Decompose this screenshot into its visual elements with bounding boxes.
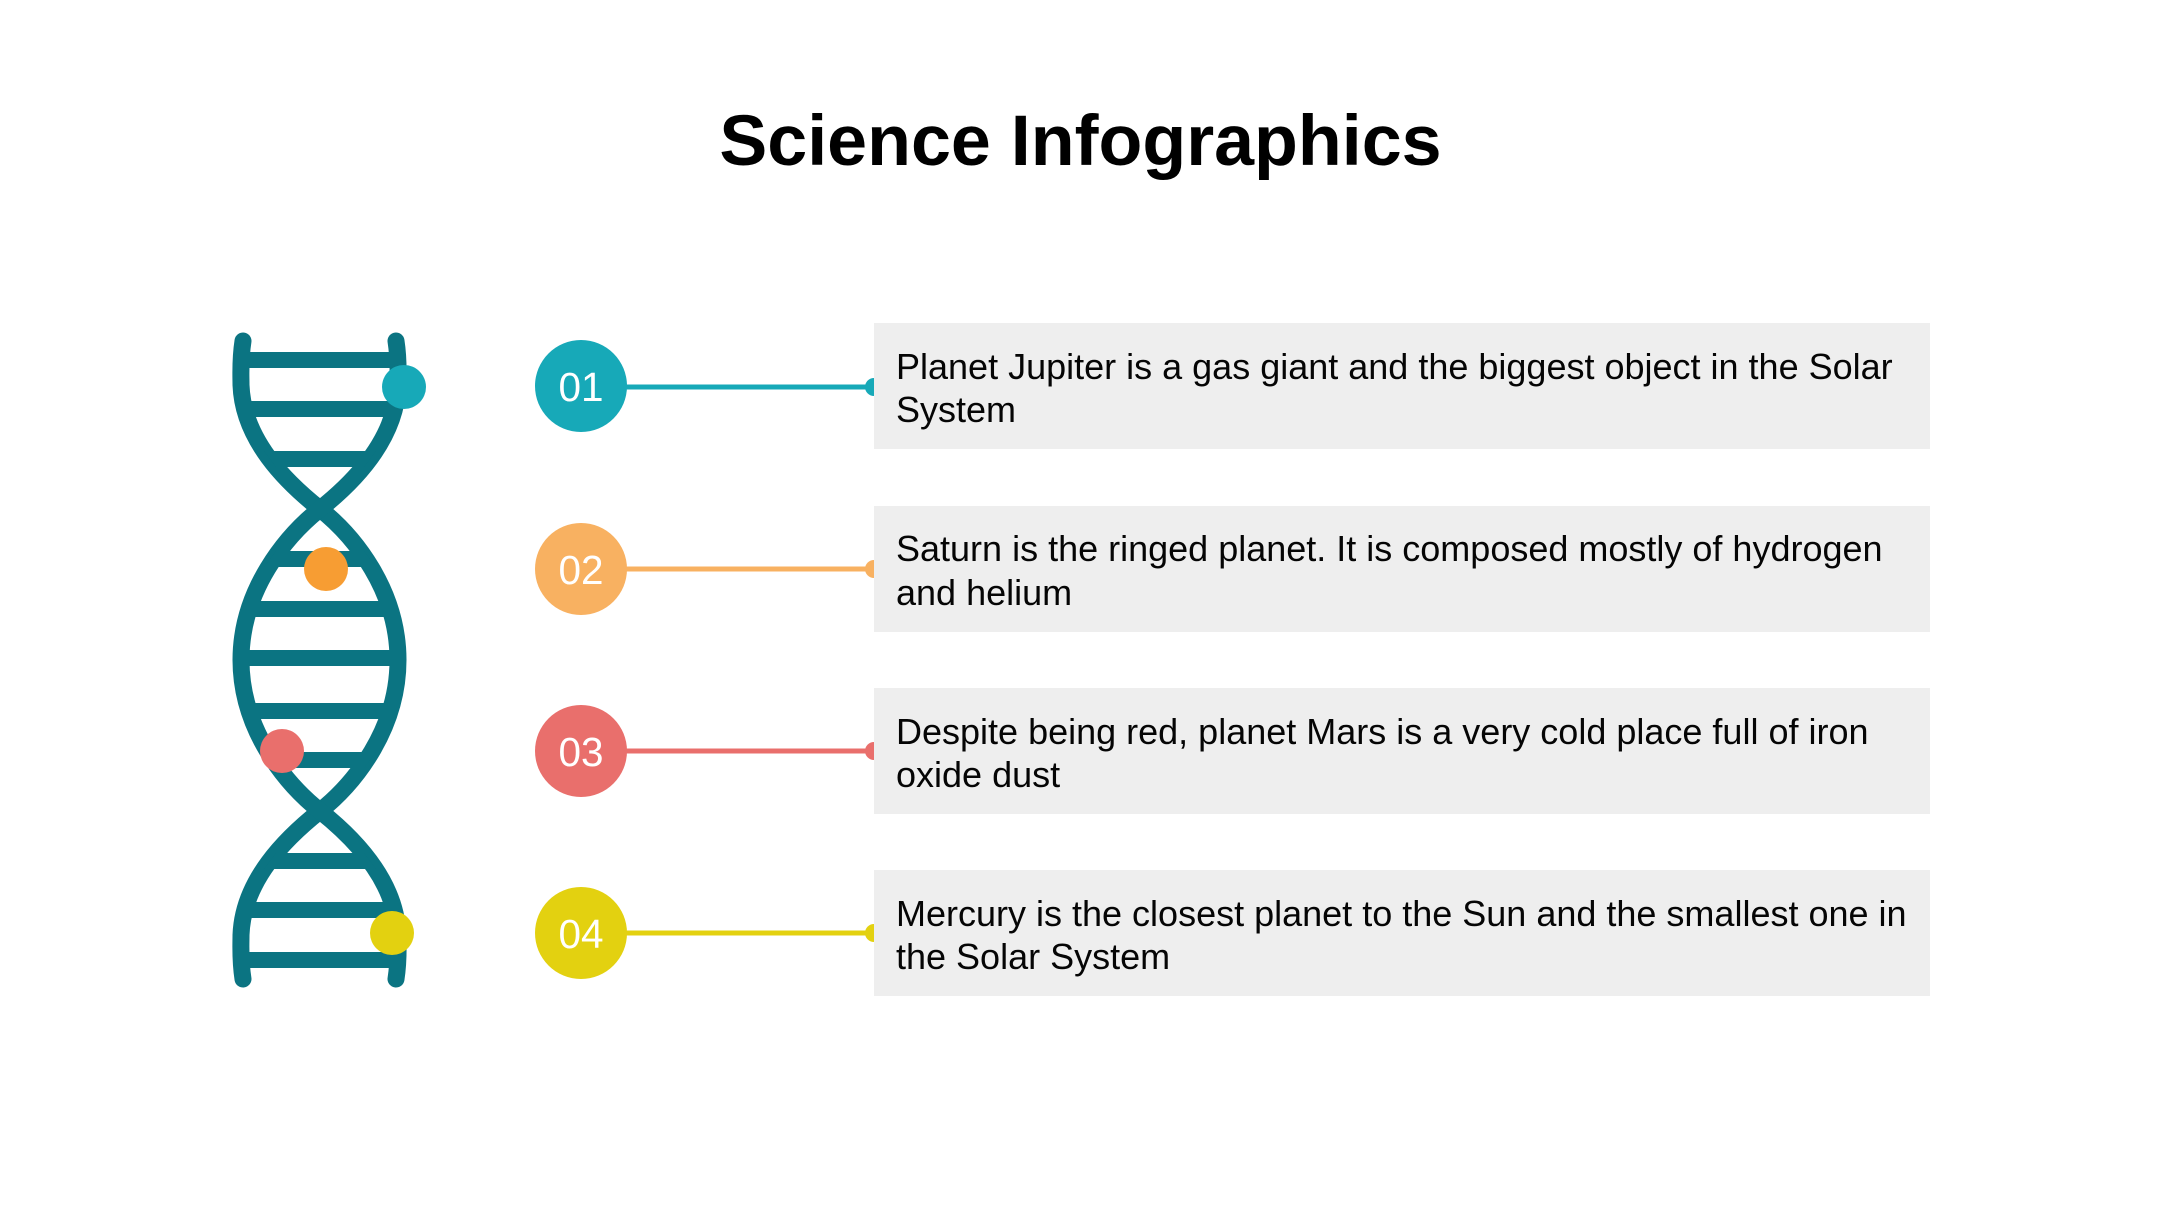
row 4: number badge: 04 bbox=[558, 911, 604, 957]
row 3: number badge: 03 bbox=[558, 729, 604, 775]
row 1: connector bbox=[626, 378, 874, 396]
row 1: number badge: 01 bbox=[558, 364, 604, 410]
title: Science Infographics bbox=[719, 101, 1442, 181]
row 4: text box bbox=[874, 870, 1930, 996]
row 2: connector bbox=[626, 560, 874, 578]
row 1: text box: System bbox=[896, 389, 1016, 430]
row 3: text box bbox=[874, 688, 1930, 814]
row 2: number badge bbox=[535, 523, 627, 615]
row 4: text box: Mercury is the closest planet to the Sun and the smallest one in bbox=[896, 893, 1907, 934]
row 4: number badge bbox=[535, 887, 627, 979]
row 4: text box: the Solar System bbox=[896, 936, 1170, 977]
row 2: text box: Saturn is the ringed planet. It is composed mostly of hydrogen bbox=[896, 528, 1883, 569]
row 3: text box: Despite being red, planet Mars is a very cold place full of iron bbox=[896, 711, 1868, 752]
row 1: text box: Planet Jupiter is a gas giant and the biggest object in the Solar bbox=[896, 346, 1893, 387]
row 2: text box: and helium bbox=[896, 572, 1072, 613]
row 3: connector bbox=[626, 742, 874, 760]
row 2: number badge: 02 bbox=[558, 547, 604, 593]
row 1: text box bbox=[874, 323, 1930, 449]
row 2: text box bbox=[874, 506, 1930, 632]
row 1: number badge bbox=[535, 340, 627, 432]
row 3: text box: oxide dust bbox=[896, 754, 1060, 795]
row 4: connector bbox=[626, 924, 874, 942]
row 3: number badge bbox=[535, 705, 627, 797]
